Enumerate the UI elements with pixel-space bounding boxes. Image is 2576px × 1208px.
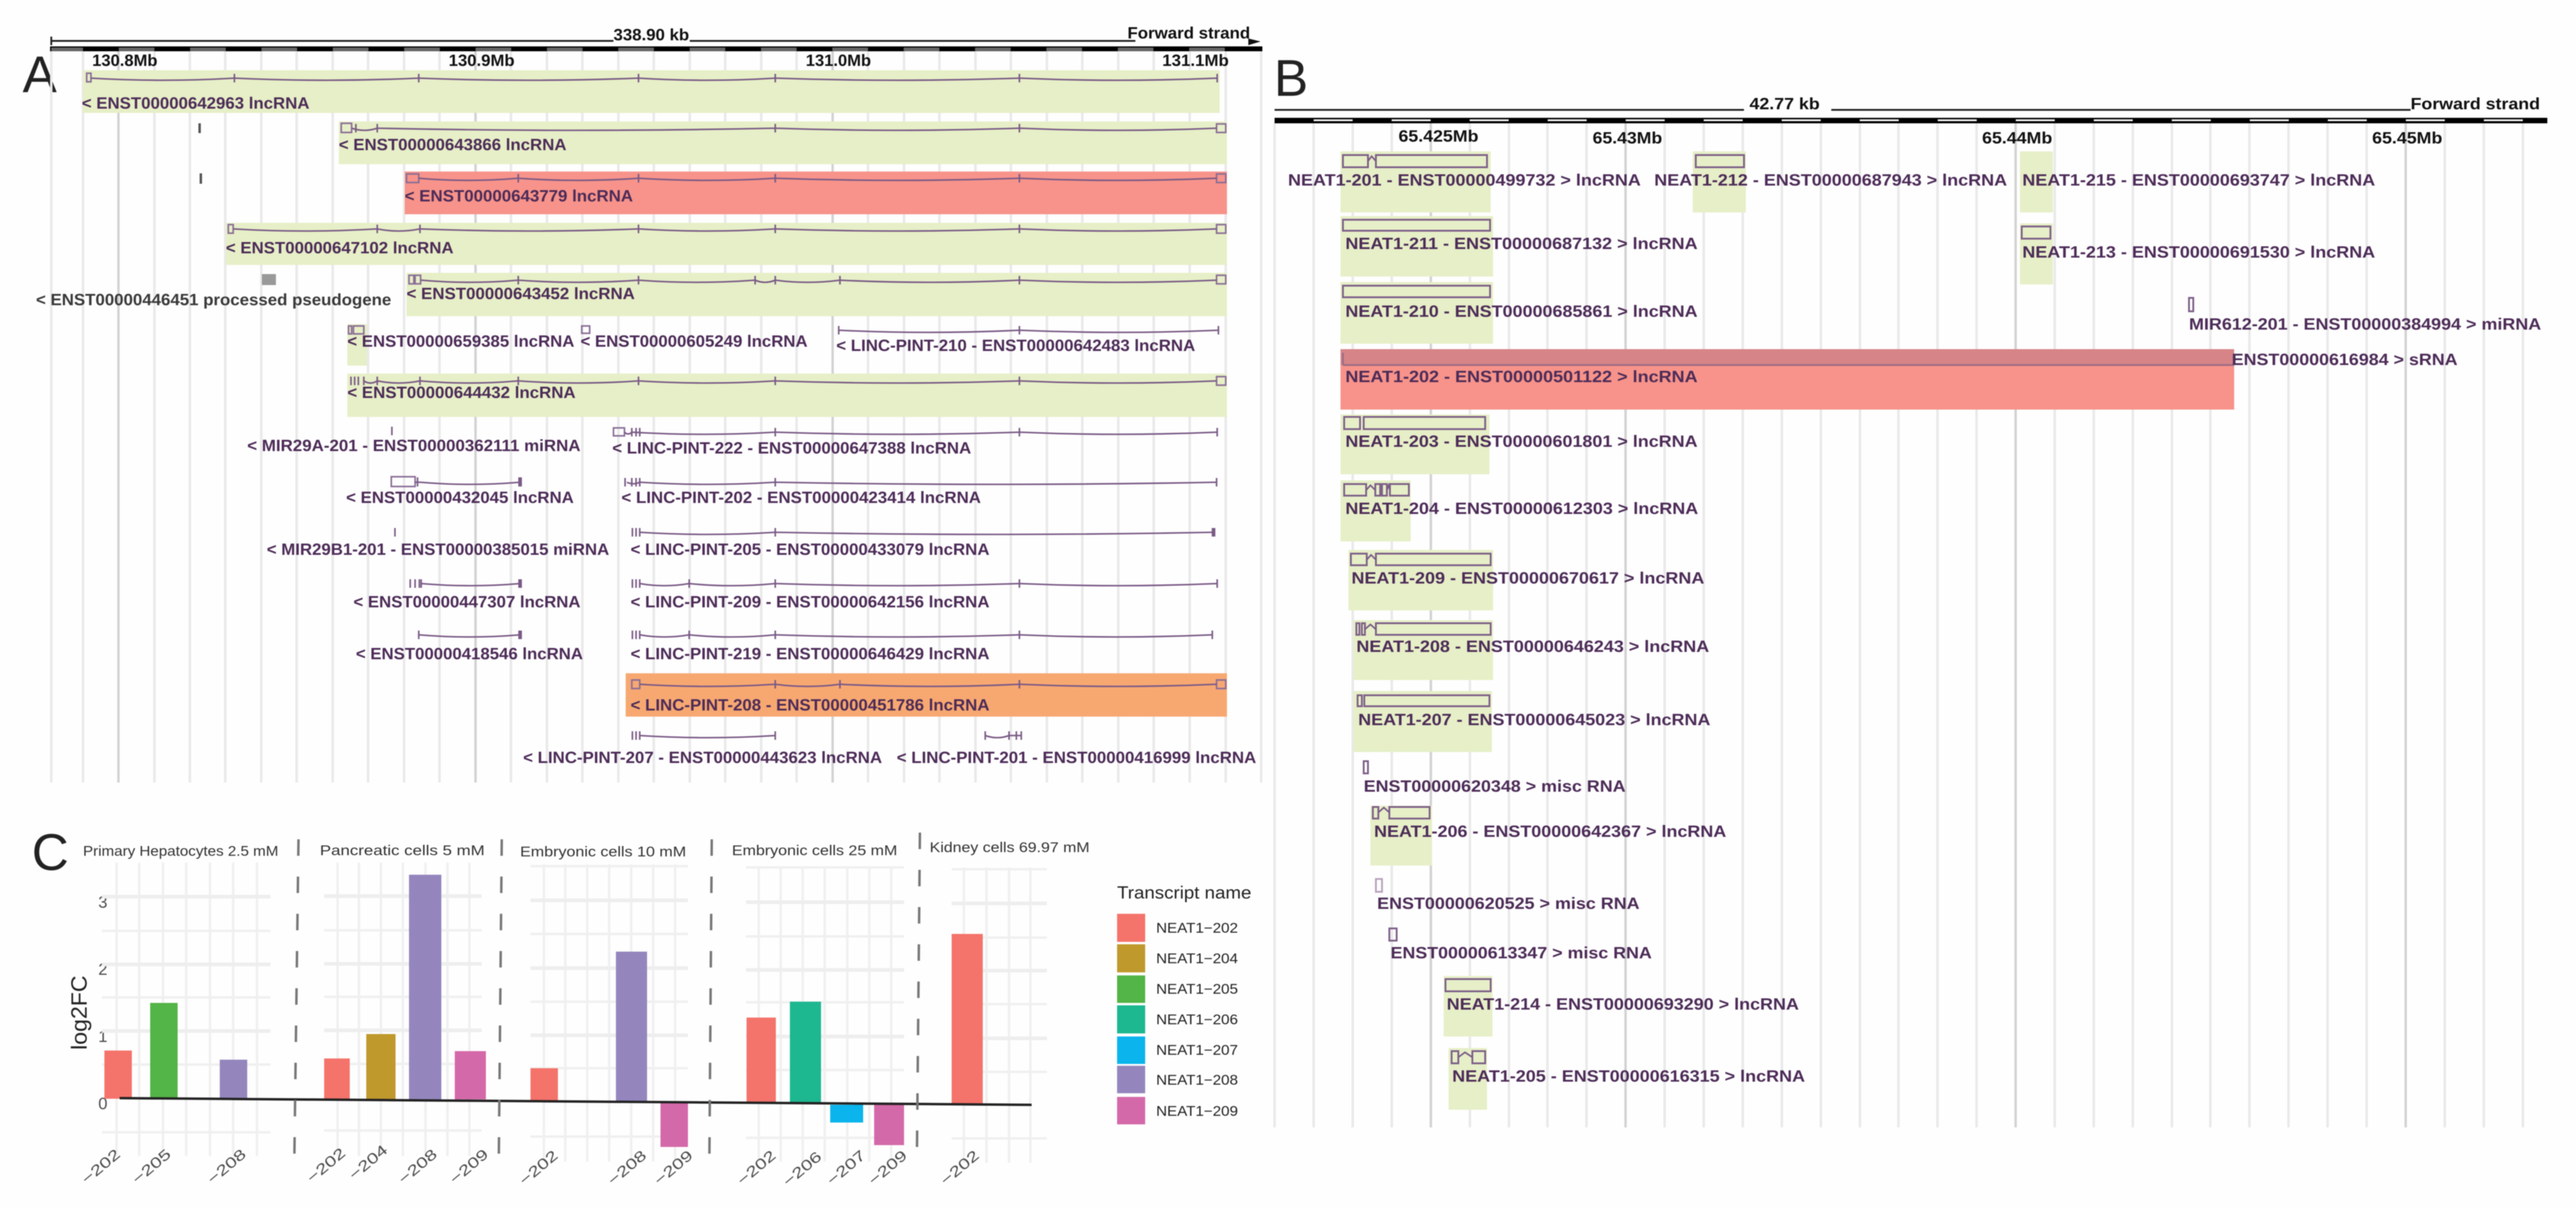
transcript NEAT1-210 — [1340, 282, 1698, 344]
transcript ENST00000643452: < ENST00000643452 lncRNA — [407, 284, 635, 303]
transcript ENST00000613347 — [1389, 928, 1652, 962]
facet: Pancreatic cells 5 mM: −209 — [447, 1146, 492, 1188]
coordinate labels B: 65.44Mb — [1982, 129, 2052, 147]
facet: Primary Hepatocytes 2.5 mM: −208 — [204, 1146, 250, 1188]
panel A: LINC-PINT locus — [23, 24, 1262, 783]
transcript ENST00000620348: ENST00000620348 > misc RNA — [1364, 777, 1626, 795]
transcript ENST00000642963 — [82, 70, 1220, 113]
transcript ENST00000447307: < ENST00000447307 lncRNA — [353, 593, 581, 611]
facet: Embryonic cells 25 mM: Embryonic cells 25 mM — [732, 842, 897, 858]
panel B: NEAT1 locus — [1274, 49, 2547, 1127]
transcript LINC-PINT-205: < LINC-PINT-205 - ENST00000433079 lncRNA — [631, 540, 990, 559]
y axis tick labels: 2 — [98, 960, 107, 978]
legend: Transcript name: Transcript name — [1117, 883, 1251, 903]
transcript ENST00000644432: < ENST00000644432 lncRNA — [347, 383, 576, 402]
facet: Embryonic cells 25 mM: −202 — [734, 1147, 780, 1189]
transcript NEAT1-206: NEAT1-206 - ENST00000642367 > lncRNA — [1374, 822, 1726, 841]
facet: Embryonic cells 10 mM: −208 — [605, 1147, 650, 1189]
dashed facet separators — [294, 833, 920, 1168]
transcript NEAT1-202 (highlighted) — [1340, 349, 2234, 410]
y axis tick labels — [98, 893, 107, 1113]
transcript LINC-PINT-210 — [836, 326, 1218, 355]
transcript ENST00000432045: < ENST00000432045 lncRNA — [346, 488, 574, 507]
transcript NEAT1-205: NEAT1-205 - ENST00000616315 > lncRNA — [1452, 1067, 1805, 1085]
transcript LINC-PINT-202: < LINC-PINT-202 - ENST00000423414 lncRNA — [621, 488, 981, 507]
panel letter B: B — [1274, 49, 1308, 107]
transcript LINC-PINT-210: < LINC-PINT-210 - ENST00000642483 lncRNA — [836, 336, 1195, 355]
legend: Transcript name: NEAT1−206 — [1156, 1011, 1238, 1027]
transcript LINC-PINT-208 (highlighted) — [626, 673, 1227, 717]
transcript NEAT1-208 — [1353, 620, 1709, 680]
transcript LINC-PINT-202 — [621, 478, 1217, 507]
facet: Embryonic cells 25 mM: −207 — [824, 1147, 869, 1189]
transcript LINC-PINT-205 — [631, 528, 1214, 559]
y axis tick labels: 3 — [98, 893, 107, 911]
transcript LINC-PINT-207: < LINC-PINT-207 - ENST00000443623 lncRNA — [523, 748, 882, 767]
panel letter C: C — [32, 823, 69, 881]
transcript NEAT1-211: NEAT1-211 - ENST00000687132 > lncRNA — [1345, 234, 1698, 253]
transcript LINC-PINT-201 — [897, 731, 1256, 767]
coordinate scale bar B — [1275, 118, 2547, 123]
transcript NEAT1-212: NEAT1-212 - ENST00000687943 > lncRNA — [1654, 171, 2007, 189]
transcript ENST00000605249: < ENST00000605249 lncRNA — [581, 332, 808, 350]
transcript NEAT1-202 (highlighted): NEAT1-202 - ENST00000501122 > lncRNA — [1345, 367, 1698, 386]
transcript LINC-PINT-209: < LINC-PINT-209 - ENST00000642156 lncRNA — [631, 593, 990, 611]
facet: Embryonic cells 10 mM: Embryonic cells 10 mM — [520, 844, 686, 859]
transcript ENST00000643866: < ENST00000643866 lncRNA — [339, 136, 566, 154]
transcript ENST00000613347: ENST00000613347 > misc RNA — [1391, 944, 1652, 962]
transcript ENST00000659385 — [347, 324, 574, 366]
transcript LINC-PINT-222: < LINC-PINT-222 - ENST00000647388 lncRNA — [612, 439, 971, 457]
transcript NEAT1-209: NEAT1-209 - ENST00000670617 > lncRNA — [1351, 569, 1704, 587]
transcript LINC-PINT-219: < LINC-PINT-219 - ENST00000646429 lncRNA — [631, 645, 990, 663]
transcript NEAT1-207: NEAT1-207 - ENST00000645023 > lncRNA — [1358, 711, 1710, 729]
transcript NEAT1-213: NEAT1-213 - ENST00000691530 > lncRNA — [2022, 243, 2375, 261]
facet: Kidney cells 69.97 mM: −202 — [938, 1147, 983, 1189]
transcript NEAT1-214: NEAT1-214 - ENST00000693290 > lncRNA — [1447, 995, 1799, 1013]
ruler: 42.77 kb and strand: 42.77 kb — [1749, 95, 1820, 113]
transcript NEAT1-211 — [1340, 216, 1698, 277]
transcript NEAT1-203: NEAT1-203 - ENST00000601801 > lncRNA — [1345, 432, 1698, 450]
coordinate labels A: 131.0Mb — [806, 51, 871, 70]
transcript ENST00000620525: ENST00000620525 > misc RNA — [1377, 894, 1640, 913]
facet: Embryonic cells 10 mM — [516, 844, 696, 1189]
y axis tick labels: 0 — [98, 1094, 107, 1113]
transcript NEAT1-212 — [1654, 151, 2007, 212]
transcript MIR612-201 — [2189, 298, 2541, 333]
legend: Transcript name: NEAT1−207 — [1156, 1042, 1238, 1058]
transcript NEAT1-204 — [1340, 480, 1698, 541]
facet: Primary Hepatocytes 2.5 mM: −205 — [129, 1146, 175, 1188]
transcript NEAT1-215 — [2020, 151, 2375, 212]
legend: Transcript name: NEAT1−204 — [1156, 950, 1238, 966]
transcript NEAT1-204: NEAT1-204 - ENST00000612303 > lncRNA — [1345, 499, 1698, 518]
transcript NEAT1-206 — [1370, 806, 1726, 866]
coordinate labels A: 130.8Mb — [92, 51, 157, 70]
transcript ENST00000659385: < ENST00000659385 lncRNA — [347, 332, 574, 350]
transcript ENST00000446451 processed pseudogene — [36, 274, 391, 309]
facet: Pancreatic cells 5 mM: Pancreatic cells 5 mM — [320, 842, 485, 858]
coordinate scale bar A — [50, 46, 1262, 51]
coordinate labels B: 65.45Mb — [2372, 129, 2442, 147]
y axis tick labels: 1 — [98, 1027, 107, 1046]
coordinate labels A: 130.9Mb — [449, 51, 515, 70]
transcript LINC-PINT-207 — [523, 731, 882, 767]
transcript ENST00000647102: < ENST00000647102 lncRNA — [226, 239, 454, 257]
facet: Primary Hepatocytes 2.5 mM: Primary Hepatocytes 2.5 mM — [83, 843, 278, 859]
exon tick — [200, 123, 201, 184]
coordinate labels B: 65.43Mb — [1593, 129, 1662, 147]
facet: Kidney cells 69.97 mM — [930, 839, 1090, 1189]
facet: Embryonic cells 25 mM — [732, 842, 911, 1190]
facet: Embryonic cells 10 mM: −209 — [651, 1147, 696, 1189]
transcript ENST00000644432 — [347, 374, 1227, 417]
transcript MIR612-201: MIR612-201 - ENST00000384994 > miRNA — [2189, 315, 2541, 333]
ruler: 338.90 kb and strand: Forward strand — [1127, 24, 1250, 42]
facet: Pancreatic cells 5 mM: −204 — [346, 1141, 391, 1184]
legend: Transcript name: NEAT1−208 — [1156, 1072, 1238, 1088]
transcript LINC-PINT-208 (highlighted): < LINC-PINT-208 - ENST00000451786 lncRNA — [631, 696, 990, 714]
transcript NEAT1-209 — [1348, 550, 1704, 610]
legend: Transcript name: NEAT1−202 — [1156, 920, 1238, 936]
transcript NEAT1-210: NEAT1-210 - ENST00000685861 > lncRNA — [1345, 302, 1698, 320]
ruler: 338.90 kb and strand — [51, 24, 1261, 45]
coordinate labels B: 65.425Mb — [1398, 127, 1478, 145]
transcript ENST00000446451 processed pseudogene: < ENST00000446451 processed pseudogene — [36, 291, 391, 309]
transcript ENST00000418546: < ENST00000418546 lncRNA — [356, 645, 583, 663]
facet: Embryonic cells 25 mM: −206 — [780, 1148, 825, 1190]
facet: Pancreatic cells 5 mM: −208 — [396, 1146, 441, 1188]
transcript ENST00000643779 (highlighted) — [405, 172, 1227, 214]
facet: Embryonic cells 25 mM: −209 — [866, 1147, 911, 1189]
zero baseline — [120, 1098, 1032, 1105]
transcript MIR29B1-201: < MIR29B1-201 - ENST00000385015 miRNA — [267, 540, 609, 559]
transcript LINC-PINT-219 — [631, 631, 1212, 663]
y axis title: log2FC — [67, 975, 92, 1050]
transcript LINC-PINT-201: < LINC-PINT-201 - ENST00000416999 lncRNA — [897, 748, 1256, 767]
transcript LINC-PINT-222 — [612, 428, 1217, 457]
transcript ENST00000642963: < ENST00000642963 lncRNA — [82, 94, 309, 112]
legend: Transcript name: NEAT1−209 — [1156, 1103, 1238, 1119]
transcript ENST00000620525 — [1376, 879, 1640, 913]
transcript MIR29A-201: < MIR29A-201 - ENST00000362111 miRNA — [247, 436, 581, 455]
panel C: log2FC bar chart — [32, 823, 1251, 1190]
transcript NEAT1-203 — [1340, 414, 1698, 474]
facet: Pancreatic cells 5 mM — [304, 842, 492, 1188]
panel letter A: A — [23, 46, 57, 103]
facet: Pancreatic cells 5 mM: −202 — [304, 1145, 349, 1187]
transcript ENST00000447307 — [353, 579, 581, 611]
ruler: 42.77 kb and strand: Forward strand — [2411, 95, 2540, 113]
transcript ENST00000620348 — [1364, 761, 1626, 795]
transcript ENST00000643452 — [407, 273, 1227, 316]
transcript ENST00000432045 — [346, 477, 574, 507]
transcript NEAT1-201: NEAT1-201 - ENST00000499732 > lncRNA — [1288, 171, 1641, 189]
coordinate labels A: 131.1Mb — [1162, 51, 1229, 70]
legend: Transcript name — [1117, 883, 1251, 1124]
transcript ENST00000643866 — [339, 121, 1227, 164]
transcript ENST00000643779 (highlighted): < ENST00000643779 lncRNA — [405, 187, 633, 205]
transcript ENST00000616984: ENST00000616984 > sRNA — [2232, 350, 2458, 369]
ruler: 42.77 kb and strand — [1275, 95, 2540, 113]
legend: Transcript name: NEAT1−205 — [1156, 981, 1238, 997]
transcript NEAT1-213 — [2020, 223, 2375, 284]
transcript NEAT1-214 — [1444, 976, 1799, 1036]
transcript NEAT1-201 — [1288, 151, 1641, 212]
facet: Primary Hepatocytes 2.5 mM — [79, 843, 278, 1188]
coordinate labels A — [92, 51, 1229, 70]
transcript NEAT1-215: NEAT1-215 - ENST00000693747 > lncRNA — [2022, 171, 2375, 189]
ruler: 338.90 kb and strand: 338.90 kb — [613, 26, 689, 44]
transcript NEAT1-208: NEAT1-208 - ENST00000646243 > lncRNA — [1356, 637, 1709, 656]
transcript LINC-PINT-209 — [631, 579, 1217, 611]
facet: Embryonic cells 10 mM: −202 — [516, 1147, 562, 1189]
transcript NEAT1-205 — [1449, 1048, 1805, 1110]
facet: Kidney cells 69.97 mM: Kidney cells 69.97 mM — [930, 839, 1090, 855]
transcript ENST00000647102 — [226, 223, 1227, 265]
facet: Primary Hepatocytes 2.5 mM: −202 — [79, 1146, 124, 1188]
coordinate labels B — [1398, 127, 2442, 147]
transcript NEAT1-207 — [1353, 691, 1710, 752]
transcript ENST00000418546 — [356, 631, 583, 663]
